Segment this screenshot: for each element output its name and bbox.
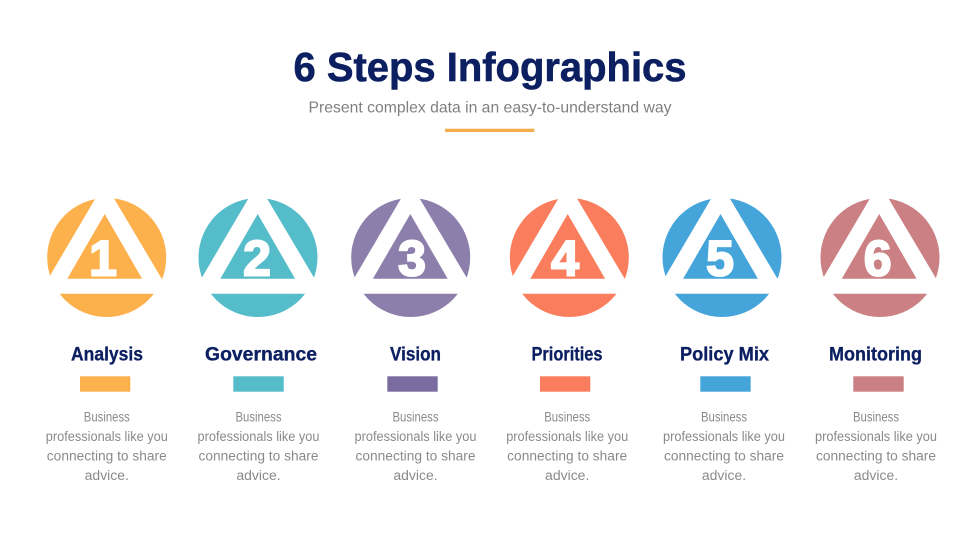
colour bar — [80, 376, 130, 392]
subtitle: Present complex data in an easy-to-understand way — [308, 99, 672, 116]
description: connecting to share — [507, 449, 627, 464]
description: connecting to share — [47, 449, 167, 464]
description: advice. — [236, 468, 281, 483]
heading: Policy Mix: Policy Mix — [680, 345, 769, 366]
icon: circle with triangle, number 3: 3 — [398, 231, 426, 287]
description: Business — [853, 410, 899, 425]
description: Business — [236, 410, 282, 425]
description: advice. — [85, 468, 129, 483]
description: connecting to share — [816, 449, 936, 464]
description: professionals like you — [506, 429, 628, 444]
description: connecting to share — [356, 449, 476, 464]
description — [354, 410, 476, 483]
icon: circle with triangle, number 1 — [39, 183, 171, 317]
colour bar — [387, 376, 438, 392]
icon: circle with triangle, number 6: 6 — [864, 231, 892, 287]
icon: circle with triangle, number 2 — [192, 183, 324, 317]
icon: circle with triangle, number 3 — [345, 183, 476, 317]
description: professionals like you — [46, 429, 168, 444]
panel: step 4 Priorities — [502, 183, 634, 483]
title: 6 Steps Infographics — [294, 44, 686, 90]
description — [815, 410, 937, 483]
description — [663, 410, 785, 483]
icon: circle with triangle, number 6 — [814, 183, 945, 317]
description: professionals like you — [354, 429, 476, 444]
panel: step 1 Analysis — [39, 183, 171, 483]
description: connecting to share — [664, 449, 784, 464]
icon: circle with triangle, number 4: 4 — [551, 231, 579, 287]
description — [506, 410, 628, 483]
description: advice. — [854, 468, 898, 483]
heading: Analysis: Analysis — [71, 345, 143, 366]
colour bar — [540, 376, 590, 392]
heading: Vision: Vision — [390, 345, 441, 366]
description: Business — [392, 410, 439, 425]
description: connecting to share — [198, 449, 318, 464]
description: Business — [544, 410, 590, 425]
description: professionals like you — [198, 429, 320, 444]
description: professionals like you — [663, 429, 785, 444]
icon: circle with triangle, number 5 — [655, 183, 786, 317]
description — [198, 410, 320, 483]
title underline — [445, 129, 534, 132]
icon: circle with triangle, number 1: 1 — [89, 231, 117, 287]
description: Business — [701, 410, 747, 425]
description — [46, 410, 168, 483]
heading: Priorities: Priorities — [532, 345, 602, 366]
heading: Governance: Governance — [205, 345, 317, 366]
colour bar — [853, 376, 904, 392]
panel: step 5 Policy Mix — [655, 183, 786, 483]
description: advice. — [393, 468, 438, 483]
description: advice. — [545, 468, 589, 483]
description: Business — [84, 410, 130, 425]
description: professionals like you — [815, 429, 937, 444]
colour bar — [233, 376, 284, 392]
icon: circle with triangle, number 2: 2 — [243, 231, 271, 287]
panel: step 3 Vision — [345, 183, 476, 483]
panel: step 6 Monitoring — [814, 183, 945, 483]
description: advice. — [702, 468, 746, 483]
heading: Monitoring: Monitoring — [829, 345, 922, 366]
panel: step 2 Governance — [192, 183, 324, 483]
icon: circle with triangle, number 4 — [502, 183, 634, 317]
colour bar — [700, 376, 751, 392]
icon: circle with triangle, number 5: 5 — [706, 231, 734, 287]
